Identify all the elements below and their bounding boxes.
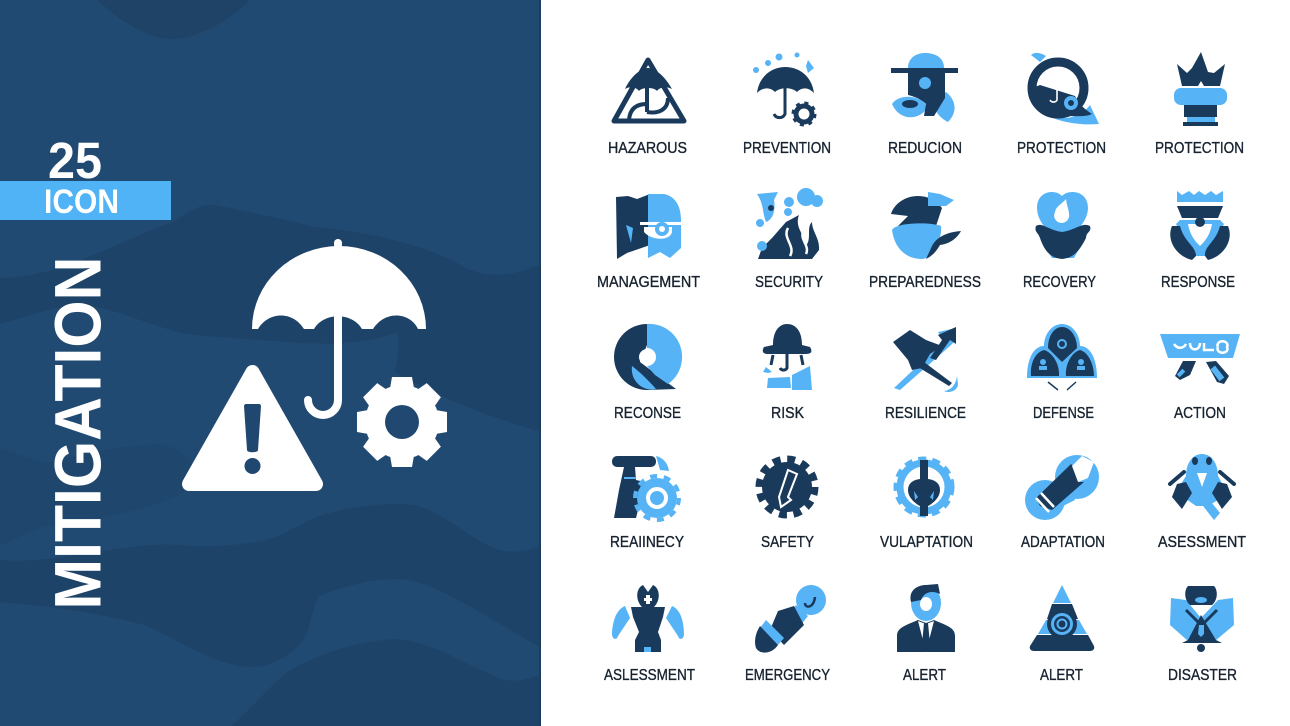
label: REAIINECY xyxy=(610,534,684,551)
icon: safety xyxy=(759,459,815,515)
label: ALERT xyxy=(1040,667,1083,684)
icon: reaiinecy xyxy=(612,456,679,520)
label: PREPAREDNESS xyxy=(869,274,981,291)
icon: disaster xyxy=(1170,586,1234,652)
label: HAZAROUS xyxy=(608,140,687,157)
icon: reconse xyxy=(614,324,682,390)
label: RECOVERY xyxy=(1023,274,1096,291)
icon: defense xyxy=(1027,324,1097,390)
label: DEFENSE xyxy=(1033,405,1094,422)
panel: white icon grid xyxy=(597,52,1246,684)
label: EMERGENCY xyxy=(745,667,830,684)
label: RECONSE xyxy=(614,405,681,422)
icon: adaptation xyxy=(1025,455,1099,520)
icon: alert person xyxy=(897,584,955,652)
main icon: umbrella, warning triangle and gear xyxy=(189,239,447,484)
icon: security xyxy=(756,188,823,259)
label: PROTECTION xyxy=(1017,140,1106,157)
label: RISK xyxy=(771,405,804,422)
label: ALERT xyxy=(903,667,946,684)
label: SAFETY xyxy=(761,534,814,551)
label: MANAGEMENT xyxy=(597,274,700,291)
label: ACTION xyxy=(1174,405,1226,422)
title: MITIGATION: MITIGATION xyxy=(40,256,114,610)
label: ADAPTATION xyxy=(1021,534,1105,551)
icon: resilience xyxy=(893,327,958,392)
icon: risk xyxy=(763,324,812,390)
label: SECURITY xyxy=(755,274,823,291)
icon: response xyxy=(1170,191,1230,260)
icon: vulaptation xyxy=(896,459,952,516)
icon: preparedness xyxy=(891,192,961,259)
label: PREVENTION xyxy=(743,140,831,157)
label: VULAPTATION xyxy=(880,534,973,551)
label: ASLESSMENT xyxy=(604,667,695,684)
label: REDUCION xyxy=(888,140,962,157)
icon: management xyxy=(616,194,682,259)
label: DISASTER xyxy=(1168,667,1237,684)
panel: left blue background xyxy=(0,0,541,726)
icon: assessment xyxy=(1170,454,1234,520)
banner: ICON: ICON xyxy=(44,183,119,221)
icon: protection umbrella xyxy=(1031,53,1099,124)
icon: reduction xyxy=(891,53,958,122)
icon: hazarous xyxy=(614,60,684,121)
banner: ICON xyxy=(0,181,171,221)
label: PROTECTION xyxy=(1155,140,1244,157)
icon: emergency xyxy=(755,585,826,653)
icon: prevention xyxy=(753,52,815,125)
label: RESPONSE xyxy=(1161,274,1235,291)
icon: alert triangle xyxy=(1030,585,1094,651)
label: RESILIENCE xyxy=(885,405,966,422)
icon: assessment figure xyxy=(612,585,684,652)
title: 25: 25 xyxy=(48,132,102,189)
icon: recovery xyxy=(1035,192,1090,259)
label: ASESSMENT xyxy=(1158,534,1246,551)
icon: action xyxy=(1160,334,1240,384)
icon: protection crown xyxy=(1174,52,1227,126)
